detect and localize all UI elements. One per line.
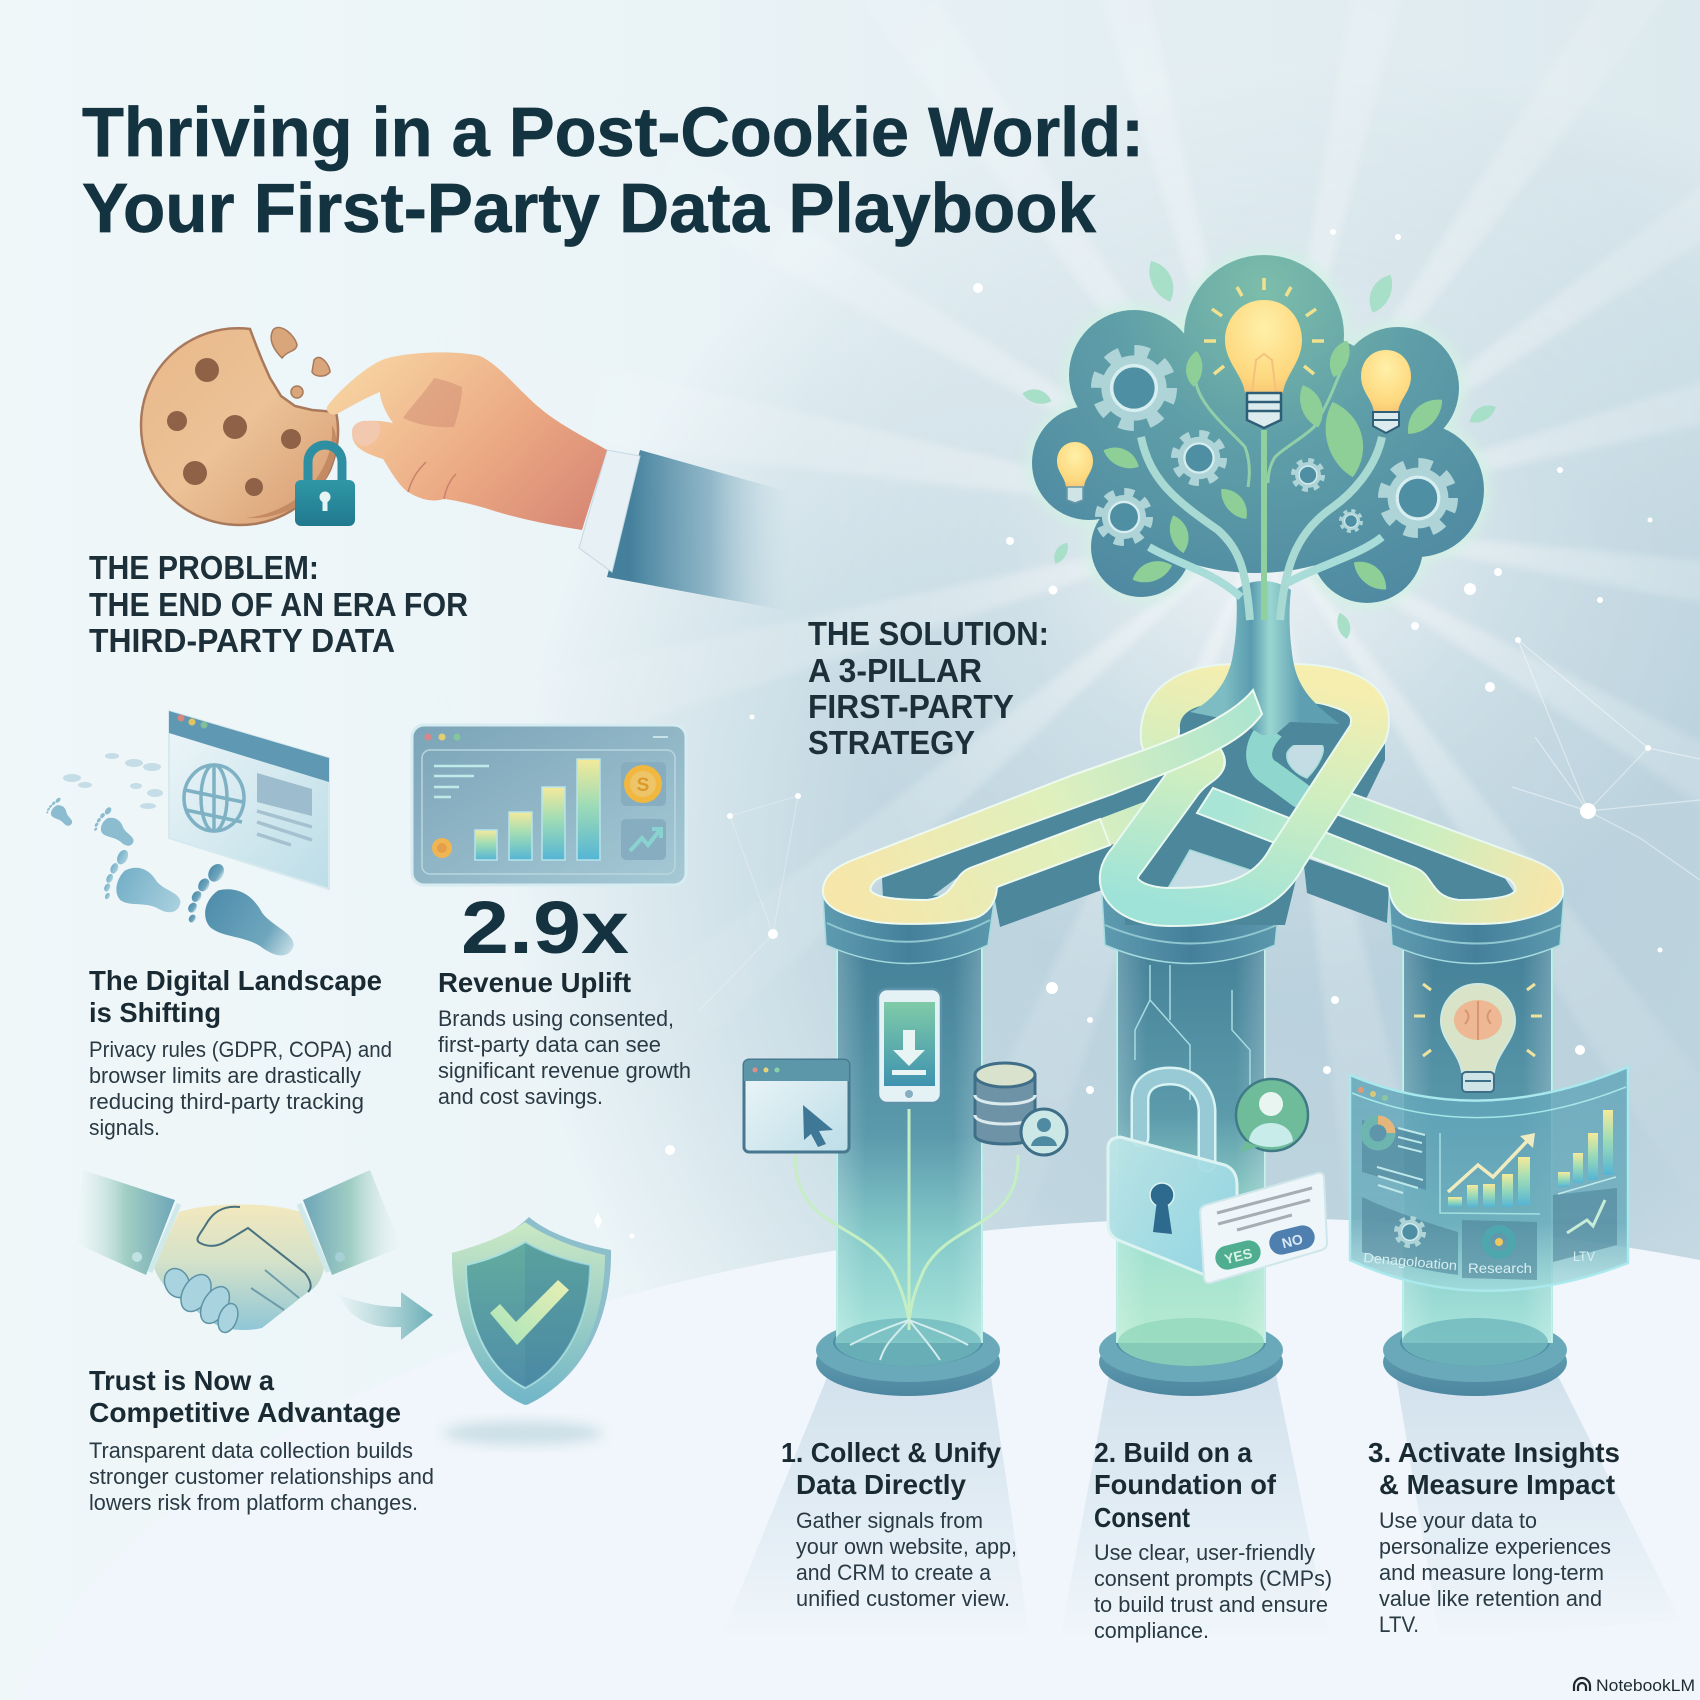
- three-pillar knot: [882, 683, 1563, 927]
- text: trust body: stronger customer relationships and: [89, 1464, 434, 1489]
- text: pillar 3 body: personalize experiences: [1379, 1534, 1611, 1559]
- link: small inner band: [1259, 727, 1300, 795]
- heading: digital landscape: is Shifting: [89, 997, 221, 1028]
- arrow: trust to shield: [336, 1292, 433, 1340]
- pillar 2 text: [1094, 1437, 1332, 1643]
- heading: pillar 1: Data Directly: [796, 1469, 966, 1500]
- text: digital landscape body: reducing third-party tracking: [89, 1089, 364, 1114]
- heading: the solution: [808, 615, 1049, 761]
- icon: database with user: [975, 1063, 1067, 1155]
- icon: browser with cursor: [744, 1060, 849, 1152]
- heading: digital landscape: The Digital Landscape: [89, 965, 382, 996]
- text: revenue uplift body: [438, 1006, 691, 1109]
- trunk and branches: [1141, 363, 1382, 735]
- title: Your First-Party Data Playbook: [82, 169, 1096, 247]
- chart: dashboard with rising bars: S: [637, 775, 649, 796]
- text: pillar 3 body: value like retention and: [1379, 1586, 1602, 1611]
- icon: brain light bulb: [1414, 984, 1542, 1092]
- heading: pillar 2: [1094, 1437, 1277, 1533]
- text: revenue uplift body: significant revenue growth: [438, 1058, 691, 1083]
- heading: pillar 1: [781, 1437, 1001, 1500]
- icon: consent card: YES: [1223, 1245, 1254, 1267]
- icon: consent card: [1200, 1173, 1327, 1283]
- heading: pillar 3: 3. Activate Insights: [1368, 1437, 1620, 1468]
- icon: phone with download: [878, 989, 941, 1103]
- light bulbs: [1057, 278, 1411, 503]
- pillar structure: [1099, 895, 1283, 1396]
- chart: curved glass dashboard: LTV: [1573, 1248, 1596, 1264]
- icon: browser window with globe: [169, 711, 329, 889]
- text: pillar 2 body: compliance.: [1094, 1618, 1209, 1643]
- pillar 1 text: [781, 1437, 1017, 1611]
- chart: curved glass dashboard: [1350, 1067, 1628, 1291]
- pillar 3 text: [1368, 1437, 1620, 1637]
- text: pillar 1 body: [796, 1508, 1017, 1611]
- pillar structure: [816, 895, 1000, 1396]
- heading: the problem: THIRD-PARTY DATA: [89, 622, 395, 659]
- ground dome: [18, 1218, 1700, 1700]
- text: digital landscape body: signals.: [89, 1115, 160, 1140]
- heading: the problem: [89, 549, 468, 659]
- text: revenue uplift body: Brands using consented,: [438, 1006, 674, 1031]
- link: left lower arm back: [970, 794, 1165, 890]
- heading: the solution: THE SOLUTION:: [808, 615, 1049, 652]
- text: pillar 1 body: and CRM to create a: [796, 1560, 991, 1585]
- text: pillar 3 body: [1379, 1508, 1611, 1637]
- chart: curved glass dashboard: Denagoloation: [1363, 1250, 1458, 1273]
- gears: [1098, 352, 1452, 541]
- NotebookLM watermark: NotebookLM: [1596, 1677, 1695, 1695]
- circuit lines: [1135, 965, 1250, 1100]
- heading: the problem: THE END OF AN ERA FOR: [89, 586, 468, 623]
- tree canopy: [1026, 249, 1490, 609]
- glowing data lines: [795, 1109, 1018, 1360]
- knot dark walls: [882, 693, 1514, 927]
- pillar 2: consent: [1099, 895, 1327, 1396]
- text: pillar 2 body: [1094, 1540, 1332, 1643]
- icon: shield with check: [443, 1213, 634, 1445]
- heading: trust: Competitive Advantage: [89, 1397, 401, 1428]
- heading: digital landscape: [89, 965, 382, 1028]
- heading: pillar 2: 2. Build on a: [1094, 1437, 1252, 1468]
- title: Thriving in a Post-Cookie World:: [82, 93, 1144, 171]
- heading: revenue uplift: Revenue Uplift: [438, 967, 631, 998]
- pillar 1: collect and unify: [744, 895, 1067, 1396]
- leaves floating around canopy: [1021, 256, 1499, 640]
- icon: user bubble: [1236, 1079, 1308, 1152]
- leaves inside canopy: [1100, 337, 1449, 596]
- icon: hand and sleeve: [327, 352, 800, 613]
- heading: pillar 1: 1. Collect & Unify: [781, 1437, 1001, 1468]
- text: pillar 3 body: and measure long-term: [1379, 1560, 1604, 1585]
- window openings in knot: [1163, 741, 1323, 898]
- chart: curved glass dashboard: Research: [1468, 1260, 1532, 1276]
- text: revenue uplift body: and cost savings.: [438, 1084, 603, 1109]
- heading: pillar 2: Consent: [1094, 1502, 1190, 1533]
- chart: dashboard with rising bars: [412, 725, 686, 885]
- pillar structure: [1383, 895, 1567, 1396]
- pillar 3: activate: [1350, 895, 1628, 1396]
- title: [82, 93, 1144, 247]
- stat: 2.9x: 2.9x: [461, 886, 629, 969]
- network lines and sparkles: [665, 229, 1700, 1155]
- text: pillar 1 body: unified customer view.: [796, 1586, 1010, 1611]
- link: dark ring interior: [1180, 702, 1345, 745]
- panel: trust: [75, 1170, 634, 1515]
- text: pillar 2 body: Use clear, user-friendly: [1094, 1540, 1316, 1565]
- icon: consent card: NO: [1280, 1231, 1304, 1251]
- text: digital landscape body: Privacy rules (GDPR, COPA) and: [89, 1037, 392, 1062]
- heading: the solution: FIRST-PARTY: [808, 688, 1014, 725]
- heading: pillar 3: [1368, 1437, 1620, 1500]
- tree of ideas: [1021, 249, 1499, 735]
- icon: bitten cookie with padlock: [141, 328, 355, 526]
- panel: revenue uplift: [412, 725, 691, 1109]
- text: pillar 2 body: to build trust and ensure: [1094, 1592, 1328, 1617]
- text: trust body: [89, 1438, 434, 1515]
- link: left arm front: [823, 690, 1262, 924]
- heading: the solution: A 3-PILLAR: [808, 652, 982, 689]
- text: revenue uplift body: first-party data can see: [438, 1032, 661, 1057]
- icon: handshake: [75, 1170, 401, 1335]
- text: pillar 2 body: consent prompts (CMPs): [1094, 1566, 1332, 1591]
- text: pillar 3 body: Use your data to: [1379, 1508, 1537, 1533]
- text: pillar 1 body: Gather signals from: [796, 1508, 983, 1533]
- text: digital landscape body: browser limits are drastically: [89, 1063, 362, 1088]
- heading: pillar 2: Foundation of: [1094, 1469, 1277, 1500]
- heading: trust: Trust is Now a: [89, 1365, 274, 1396]
- icon: footprints: [44, 753, 310, 976]
- heading: the solution: STRATEGY: [808, 724, 975, 761]
- text: pillar 1 body: your own website, app,: [796, 1534, 1017, 1559]
- heading: trust: [89, 1365, 401, 1428]
- panel: digital landscape: [44, 711, 392, 1140]
- heading: pillar 3: & Measure Impact: [1379, 1469, 1615, 1500]
- text: digital landscape body: [89, 1037, 392, 1140]
- text: trust body: lowers risk from platform changes.: [89, 1490, 418, 1515]
- heading: the problem: THE PROBLEM:: [89, 549, 319, 586]
- link: central loop: [1119, 683, 1370, 907]
- text: pillar 3 body: LTV.: [1379, 1612, 1419, 1637]
- link: right arm: [1197, 787, 1563, 924]
- icon: glass padlock: [1108, 1076, 1237, 1275]
- panel: the problem: [89, 328, 800, 659]
- text: trust body: Transparent data collection builds: [89, 1438, 413, 1463]
